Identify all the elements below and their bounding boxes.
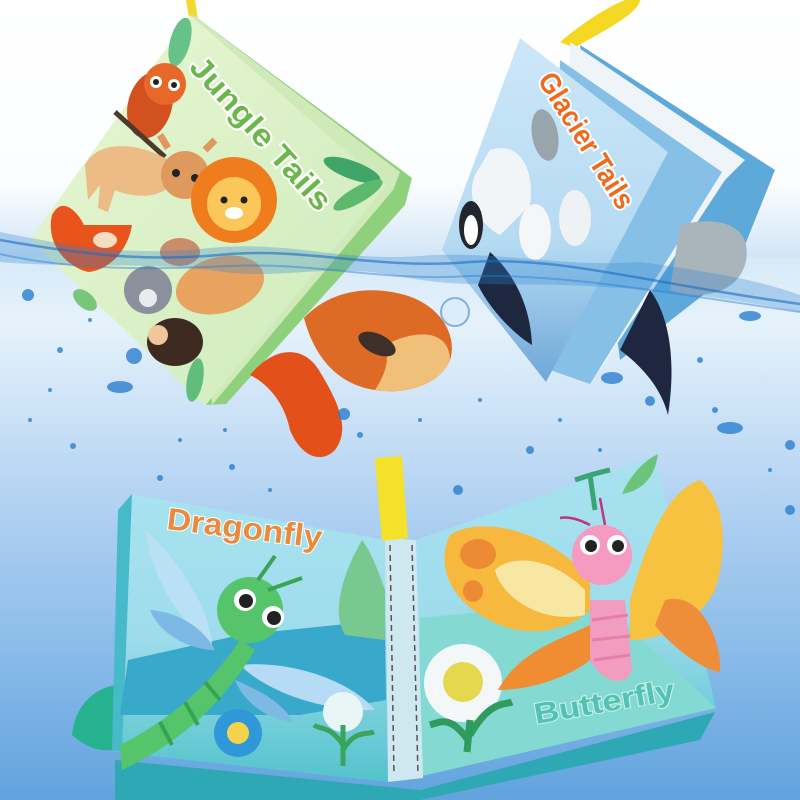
grey tail [670,221,747,295]
orange tails from Jungle book [250,290,452,457]
large clear bubble [441,298,469,326]
seals [519,190,591,260]
stitches [390,545,394,775]
right page [416,456,716,776]
green side pages [188,14,412,405]
background: sky above the water [0,0,800,262]
fox tail [304,290,452,391]
left page [115,494,388,782]
title: Glacier Tails: Glacier Tails [531,67,640,215]
yellow tag [375,456,408,541]
deer [85,135,215,212]
book: Dragonfly and Butterfly [72,454,723,800]
cover [442,38,668,382]
butterfly [444,480,723,690]
book: Glacier Tails [442,0,775,415]
green leaves top right [575,454,658,510]
book: Jungle Tails [30,0,412,406]
left spine edge [112,494,132,752]
hanging ribbon [186,0,198,24]
leaves [164,15,196,69]
dragonfly [120,530,375,770]
water surface waves [0,232,800,312]
green fabric tail [72,684,125,750]
tree [339,540,385,640]
polar bear [472,148,531,235]
lion [191,157,277,243]
title: Dragonfly: Dragonfly [165,501,325,555]
title: Jungle Tails: Jungle Tails [183,49,339,218]
lower band right [420,600,716,776]
red tail [250,352,342,457]
blue band left [120,620,386,715]
large white flower [424,644,512,752]
animals under water [69,238,271,366]
penguin [459,201,483,249]
book bottom edge [115,712,715,800]
hanging ribbon [560,0,640,48]
spine [385,538,423,782]
water bubbles [22,289,795,515]
white small flower [314,692,374,766]
blue flower [214,709,262,757]
walrus [528,107,562,163]
orca [478,252,532,345]
background: underwater gradient [0,258,800,800]
owl [115,63,186,157]
back pages [580,45,775,360]
title: Butterfly: Butterfly [532,675,677,731]
cover [30,15,386,406]
fox [51,206,132,272]
dark fin [620,290,672,415]
